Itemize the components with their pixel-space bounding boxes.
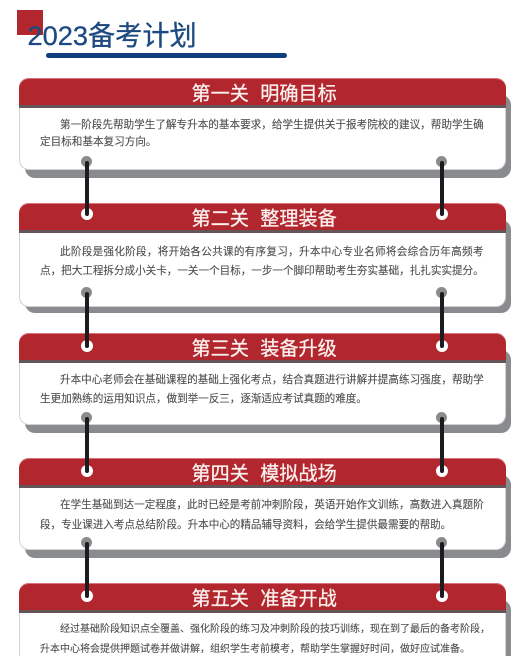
stage 3 header bar	[19, 333, 506, 363]
red square accent	[17, 10, 43, 35]
panel: stage 4	[19, 458, 511, 558]
connector: stage 3 to 4 right	[436, 412, 448, 477]
card body	[19, 78, 506, 170]
stage 5 description: 升本中心将会提供押题试卷并做讲解，组织学生考前模考，帮助学生掌握好时间，做好应试准备。	[40, 644, 470, 655]
stage 2 header bar	[19, 203, 506, 233]
stage 1 description	[40, 118, 484, 148]
connector: stage 2 to 3 left	[81, 287, 93, 352]
stage 2 description	[40, 246, 484, 277]
connector: stage 2 to 3 right	[436, 287, 448, 352]
stage 4 header bar: 第四关 模拟战场	[192, 464, 337, 485]
panel: stage 2	[19, 203, 511, 313]
card shadow	[25, 220, 511, 313]
card body	[19, 458, 506, 550]
stage 2 header bar: 第二关 整理装备	[192, 209, 337, 230]
stage 3 description: 生更加熟练的运用知识点，做到举一反三，逐渐适应考试真题的难度。	[40, 393, 367, 405]
connector: stage 1 to 2 left	[81, 156, 93, 220]
stage 4 description: 在学生基础到达一定程度，此时已经是考前冲刺阶段，英语开始作文训练，高数进入真题阶	[60, 499, 484, 511]
card shadow	[25, 350, 511, 433]
panel: stage 3	[19, 333, 511, 433]
stage 3 description	[40, 374, 484, 405]
connector: stage 1 to 2 right	[436, 156, 448, 220]
stage 3 header bar: 第三关 装备升级	[192, 339, 337, 360]
stage 1 header bar	[19, 78, 506, 108]
stage 5 description	[40, 623, 490, 655]
stage 4 description	[40, 498, 484, 531]
title underline	[46, 53, 287, 58]
title text: 2023备考计划	[28, 20, 197, 51]
card body	[19, 333, 506, 425]
connector: stage 4 to 5 right	[436, 537, 448, 602]
card shadow	[25, 600, 511, 656]
stage 1 description: 第一阶段先帮助学生了解专升本的基本要求，给学生提供关于报考院校的建议，帮助学生确	[60, 119, 484, 131]
stage 1 header bar: 第一关 明确目标	[192, 84, 337, 105]
stage 5 description: 经过基础阶段知识点全覆盖、强化阶段的练习及冲刺阶段的技巧训练，现在到了最后的备考阶段，	[60, 624, 490, 635]
card body	[19, 203, 506, 307]
title block	[17, 10, 287, 58]
card shadow	[25, 95, 511, 178]
panel: stage 1	[19, 78, 511, 178]
stage 5 header bar: 第五关 准备开战	[192, 589, 337, 610]
stage 4 description: 段，专业课进入考点总结阶段。升本中心的精品辅导资料，会给学生提供最需要的帮助。	[40, 519, 451, 531]
connector: stage 4 to 5 left	[81, 537, 93, 602]
stage 4 header bar	[19, 458, 506, 488]
connector: stage 3 to 4 left	[81, 412, 93, 477]
stage 3 description: 升本中心老师会在基础课程的基础上强化考点，结合真题进行讲解并提高练习强度，帮助学	[60, 374, 484, 386]
panel: stage 5	[19, 583, 511, 656]
stage 1 description: 定目标和基本复习方向。	[40, 136, 157, 148]
stage 5 header bar	[19, 583, 506, 613]
card body	[19, 583, 506, 656]
card shadow	[25, 475, 511, 558]
stage 2 description: 此阶段是强化阶段，将开始各公共课的有序复习，升本中心专业名师将会综合历年高频考	[60, 246, 484, 258]
stage 2 description: 点，把大工程拆分成小关卡，一关一个目标，一步一个脚印帮助考生夯实基础，扎扎实实提分。	[40, 265, 484, 277]
